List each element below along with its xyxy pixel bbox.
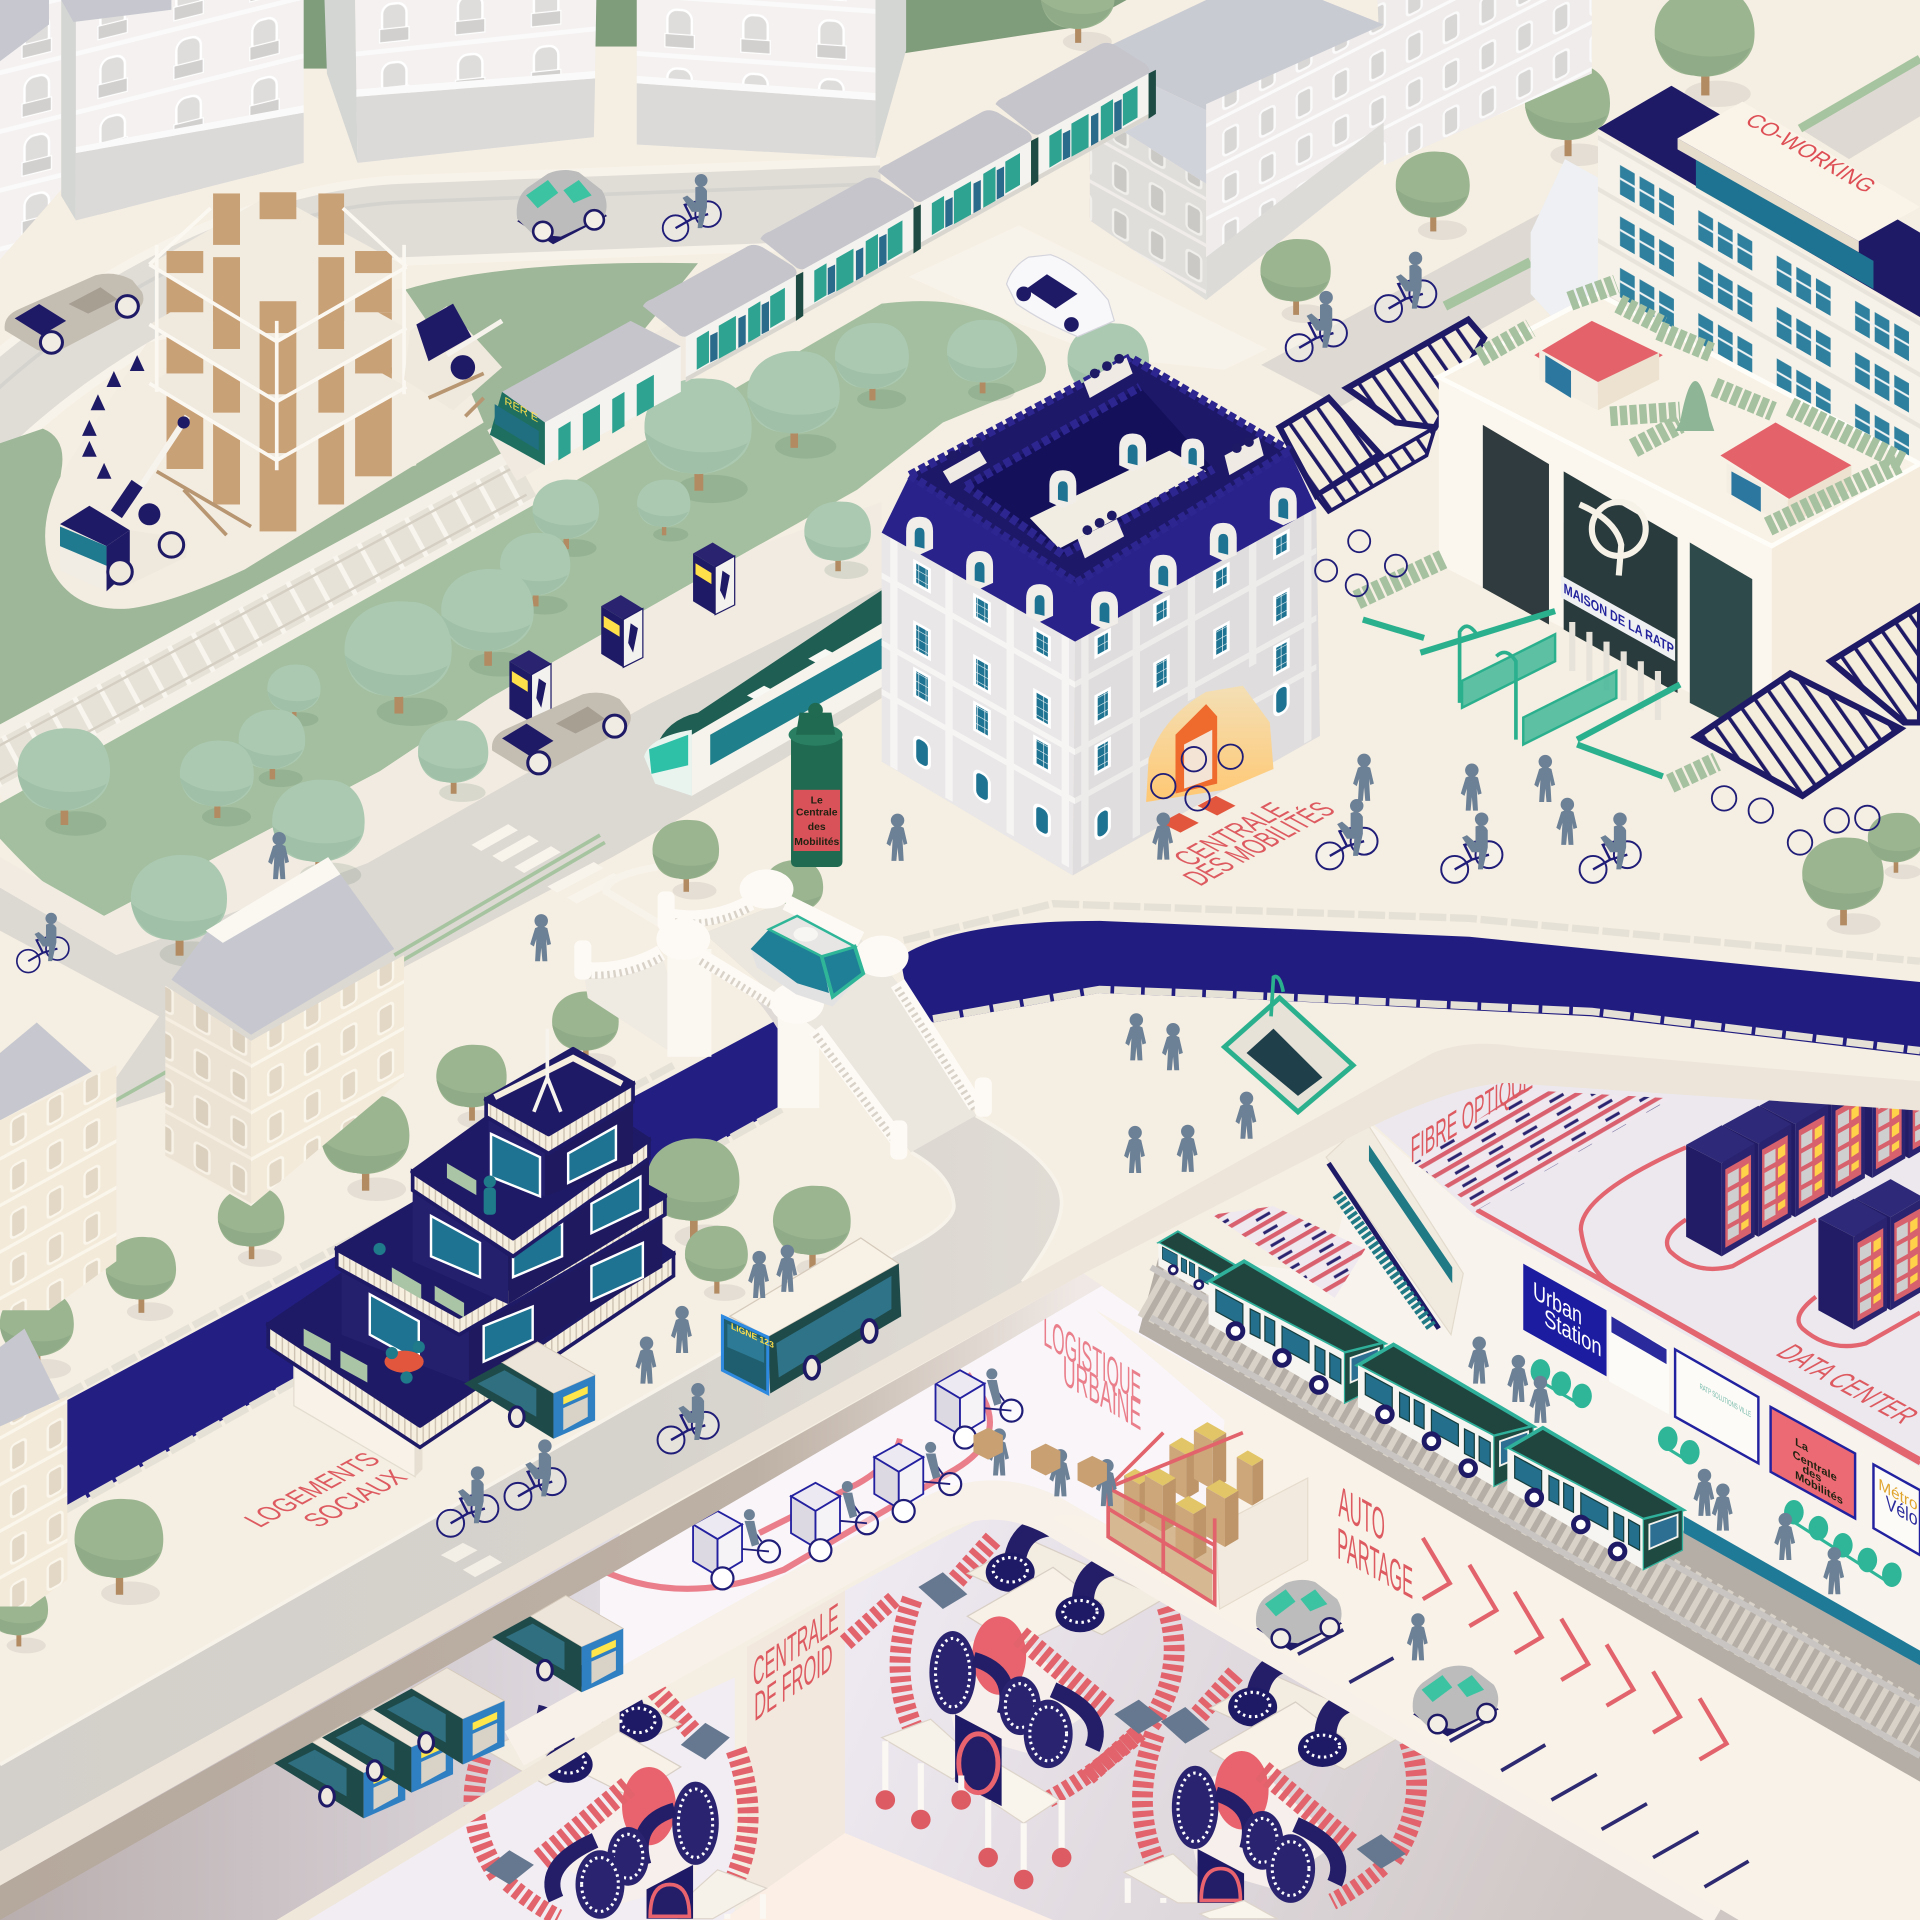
glowing archway bbox=[1146, 686, 1273, 802]
bridge bbox=[574, 869, 992, 1160]
cargo bikes bbox=[693, 1368, 1022, 1589]
cooling machines bbox=[474, 1525, 1417, 1919]
auto partage label bbox=[1337, 1477, 1413, 1610]
delivery workers with parcels bbox=[973, 1428, 1117, 1506]
construction site patch bbox=[45, 288, 484, 609]
traffic cones bbox=[82, 355, 144, 479]
auto partage pedestrian bbox=[1407, 1613, 1428, 1660]
roof top ring bbox=[910, 358, 1289, 583]
terrace deck bbox=[1439, 294, 1920, 546]
urban station sign: Station bbox=[1544, 1303, 1602, 1363]
tower facade bbox=[1598, 132, 1920, 527]
parcel shelves bbox=[1108, 1422, 1263, 1604]
logistique urbaine label bbox=[1043, 1307, 1141, 1440]
lower level bus floor bbox=[0, 1531, 620, 1920]
social housing building bbox=[268, 1029, 673, 1477]
road edge lines bbox=[0, 1116, 1062, 1764]
metro train bbox=[1158, 1231, 1682, 1570]
rer e sign: RER E bbox=[504, 394, 538, 425]
park trees bbox=[18, 320, 1149, 967]
block one left wall bbox=[342, 1266, 469, 1384]
first car roof bbox=[502, 321, 681, 422]
isometric city scene: CENTRALE bbox=[753, 1595, 839, 1696]
centrale des mobilites floor label: DES MOBILITÉS bbox=[1174, 797, 1343, 890]
slab underside bbox=[0, 1273, 1102, 1920]
top facade buildings bbox=[0, 0, 1592, 260]
auto partage floor bbox=[1053, 1310, 1920, 1920]
bikes by shelter bbox=[1315, 530, 1880, 855]
white panel with navy band bbox=[1609, 1315, 1669, 1414]
block one windows bbox=[370, 1243, 643, 1362]
front facade bbox=[1439, 380, 1772, 735]
red floor line bbox=[1477, 1210, 1920, 1460]
red chevrons bbox=[1423, 1538, 1727, 1760]
orange locker bbox=[1176, 704, 1217, 793]
plaza pedestrians by canal bbox=[1124, 1013, 1256, 1173]
road crosswalk bbox=[441, 1543, 502, 1577]
centrale des mobilites poster: Mobilités bbox=[1795, 1468, 1843, 1508]
top terrace floor bbox=[486, 1049, 633, 1134]
balustrade balusters bbox=[583, 907, 976, 1145]
left wall bbox=[882, 533, 1075, 876]
upper columns bbox=[167, 257, 392, 394]
block three right wall bbox=[545, 1103, 633, 1196]
top green lawns bbox=[298, 0, 1127, 69]
roof slab bbox=[149, 193, 407, 342]
second terrace floor bbox=[337, 1129, 665, 1316]
third terrace floor bbox=[413, 1074, 649, 1238]
shared cars bbox=[1256, 1580, 1499, 1736]
quay railings bbox=[59, 904, 1920, 1511]
crane truck bbox=[60, 416, 251, 591]
solutions ville poster bbox=[1675, 1349, 1758, 1463]
third terrace rim bbox=[413, 1140, 649, 1256]
fibre optique cable field bbox=[1212, 1090, 1671, 1298]
white car bbox=[1007, 255, 1114, 337]
first terrace floor bbox=[268, 1153, 673, 1425]
main city bus: LIGNE 123 bbox=[731, 1321, 774, 1350]
block one right wall bbox=[469, 1206, 662, 1384]
cactus pot bbox=[1675, 381, 1714, 431]
lower columns bbox=[167, 367, 392, 531]
road on slab bbox=[0, 902, 1062, 1851]
centrale des mobilites building bbox=[882, 354, 1320, 876]
left quay patch bbox=[583, 953, 689, 1056]
small bus under housing bbox=[464, 1342, 595, 1439]
platform edge strip bbox=[1684, 1516, 1920, 1665]
morris column bbox=[789, 703, 842, 867]
green metro entrance railings bbox=[1363, 611, 1680, 776]
building left edge middle bbox=[0, 1022, 116, 1310]
metro entrance with escalator bbox=[1224, 977, 1353, 1112]
right wall mouldings bbox=[1075, 508, 1316, 871]
stone posts bbox=[574, 869, 992, 1160]
top terrace rim bbox=[486, 1084, 633, 1153]
morris column: Centrale bbox=[796, 808, 838, 819]
light beam over machine room bbox=[514, 1500, 1722, 1908]
charging stations bbox=[509, 542, 735, 722]
red roof pavilions bbox=[1534, 321, 1851, 527]
isometric city scene: PARTAGE bbox=[1337, 1518, 1413, 1610]
small building behind terrace bbox=[1531, 159, 1598, 367]
block three windows bbox=[491, 1127, 616, 1196]
lower bay wall and floor bbox=[722, 1591, 1053, 1920]
terrace tables bbox=[384, 1351, 424, 1373]
bike shelters bbox=[1280, 320, 1484, 512]
tram bbox=[644, 590, 884, 796]
centrale des mobilites poster: des bbox=[1802, 1462, 1822, 1485]
logements sociaux label bbox=[237, 1449, 415, 1531]
metro velo poster: Métro bbox=[1878, 1475, 1918, 1515]
central park lawn bbox=[0, 301, 1046, 916]
roof column stubs bbox=[167, 192, 392, 333]
upper left lawn bbox=[0, 263, 698, 735]
red bike stands bbox=[1161, 796, 1236, 833]
navy roof bbox=[1598, 86, 1920, 317]
underground buses bbox=[274, 1596, 623, 1818]
logements sociaux label: LOGEMENTS bbox=[237, 1449, 388, 1531]
station passengers bbox=[1468, 1337, 1844, 1594]
second crane by train bbox=[404, 304, 502, 416]
street pedestrians and cyclists west bbox=[17, 814, 907, 973]
green benches bbox=[1531, 1359, 1902, 1587]
main city bus bbox=[722, 1238, 901, 1393]
isometric city scene: URBAINE bbox=[1063, 1346, 1141, 1440]
coworking roof box bbox=[1678, 102, 1920, 241]
data center floor bbox=[1365, 1081, 1920, 1467]
logistics pink track bbox=[606, 1374, 990, 1589]
building a bbox=[0, 0, 61, 260]
pedestrians by bus stop bbox=[636, 1245, 797, 1384]
building d bbox=[637, 0, 876, 158]
ratp logo bbox=[1580, 502, 1646, 576]
construction tower bbox=[149, 192, 407, 531]
locker drawers bbox=[1184, 730, 1212, 789]
morris column: Mobilités bbox=[794, 837, 839, 848]
station wall and platform bbox=[1224, 1120, 1920, 1663]
base side bbox=[415, 1425, 422, 1477]
third floor slab bbox=[149, 312, 407, 460]
building f bbox=[1378, 0, 1592, 165]
bridge deck bbox=[704, 902, 976, 1152]
cyclists on lower road bbox=[437, 1383, 719, 1537]
right side road and green lane bbox=[909, 59, 1920, 407]
canal upper section bbox=[901, 921, 1920, 1056]
maison de la ratp sign: MAISON DE LA RATP bbox=[1564, 581, 1674, 658]
terrace planters bbox=[304, 1163, 476, 1382]
auto partage label: AUTO bbox=[1338, 1477, 1385, 1552]
pilotis lines bbox=[1572, 622, 1658, 720]
maison de la ratp building bbox=[1439, 86, 1920, 735]
centrale des mobilites floor label: CENTRALE bbox=[1165, 798, 1297, 870]
white base columns bbox=[294, 1359, 415, 1477]
mansard roof bbox=[882, 358, 1316, 642]
first car side bbox=[545, 347, 681, 465]
roof crenellations bbox=[910, 358, 1289, 583]
isometric city scene: DE FROID bbox=[754, 1634, 833, 1731]
left wall windows bbox=[915, 561, 1049, 838]
right wall bbox=[1073, 508, 1320, 876]
left machine room white area bbox=[294, 1678, 735, 1920]
second terrace rim bbox=[337, 1196, 665, 1335]
large haussmann block top right bbox=[1090, 0, 1384, 300]
morris column: des bbox=[808, 822, 826, 833]
ratp plaza planters bbox=[1357, 558, 1717, 784]
terrace residents bbox=[373, 1176, 496, 1384]
middle columns bbox=[167, 312, 392, 453]
glass panel center bbox=[1564, 471, 1678, 693]
building c bbox=[324, 0, 358, 163]
right wall windows bbox=[1096, 531, 1288, 841]
metro velo poster bbox=[1873, 1464, 1920, 1555]
shuttle on bridge bbox=[751, 916, 863, 1007]
beam on lower floor bbox=[277, 1712, 620, 1920]
gray car on top road bbox=[517, 170, 607, 244]
urban station sign: Urban bbox=[1533, 1276, 1582, 1331]
inner courtyard facade bbox=[1030, 451, 1206, 549]
left wall mouldings bbox=[882, 533, 1075, 871]
green roof planters bbox=[1479, 284, 1904, 527]
track bed bbox=[1139, 1239, 1920, 1782]
bikes in archway bbox=[1151, 744, 1243, 811]
logistics floor bbox=[600, 1273, 1261, 1714]
chimneys bbox=[943, 354, 1264, 558]
streets and tram road bbox=[0, 502, 882, 1108]
logements sociaux label: SOCIAUX bbox=[296, 1466, 415, 1531]
building b bbox=[61, 0, 76, 220]
maison de la ratp sign bbox=[1561, 576, 1675, 661]
centrale des mobilites floor label bbox=[1165, 797, 1343, 890]
first terrace rim bbox=[268, 1254, 673, 1447]
right foreground bike shelters bbox=[1696, 606, 1920, 796]
bridge balustrades bbox=[583, 902, 976, 1140]
railway track with ballast bbox=[0, 104, 1108, 786]
morris column: Le bbox=[811, 795, 823, 806]
beige parked car west bbox=[5, 274, 143, 353]
beige car near chargers bbox=[492, 693, 631, 774]
centrale des mobilites poster: La bbox=[1795, 1435, 1808, 1455]
first car livery bbox=[558, 375, 654, 460]
urban station sign bbox=[1523, 1264, 1607, 1376]
isometric city scene: LOGISTIQUE bbox=[1043, 1307, 1141, 1412]
data center ring tracks bbox=[1581, 1147, 1920, 1463]
courtyard bbox=[966, 387, 1213, 555]
navy band on panel bbox=[1611, 1316, 1667, 1364]
concrete slab edge bbox=[0, 1044, 1920, 1886]
coworking roof lip bbox=[1678, 138, 1859, 252]
dormers bbox=[906, 433, 1297, 629]
escalator bbox=[1326, 1120, 1463, 1335]
top parapet bbox=[495, 1058, 622, 1097]
side facade bbox=[1772, 467, 1920, 735]
scaffolding rails bbox=[149, 208, 407, 470]
solutions ville poster: RATP SOLUTIONS VILLE bbox=[1700, 1381, 1751, 1419]
parking dashes bbox=[1298, 1630, 1749, 1887]
machine room background bbox=[845, 1518, 1739, 1920]
bridge arch underside bbox=[711, 961, 778, 1029]
block two right wall bbox=[508, 1158, 649, 1304]
cab windscreen bbox=[495, 404, 539, 451]
centrale de froid label on wall bbox=[753, 1595, 839, 1731]
centrale cyclist bbox=[1152, 812, 1173, 860]
stone piers bbox=[667, 949, 819, 1108]
centrale des mobilites poster bbox=[1771, 1407, 1855, 1518]
canal lower section bbox=[64, 1016, 784, 1511]
curved upper road bbox=[0, 184, 882, 429]
glass panel left bbox=[1483, 425, 1549, 624]
second floor slab bbox=[149, 253, 407, 402]
block three left wall bbox=[489, 1117, 545, 1196]
storage wall bbox=[1216, 1478, 1308, 1609]
server racks bbox=[1686, 1100, 1920, 1330]
building left edge lower bbox=[0, 1329, 67, 1607]
first car cab bbox=[490, 392, 545, 465]
centrale des mobilites poster: Centrale bbox=[1793, 1447, 1837, 1485]
coworking glass band bbox=[1696, 159, 1873, 289]
rooftop antenna bbox=[534, 1029, 561, 1112]
block two left wall bbox=[413, 1190, 508, 1304]
block two windows bbox=[431, 1177, 640, 1277]
building far left upper bbox=[165, 857, 404, 1206]
plaza pedestrians and cyclists bbox=[663, 174, 1641, 883]
RER train bbox=[490, 43, 1156, 465]
glass panel right bbox=[1690, 542, 1752, 735]
isometric city scene: FIBRE OPTIQUE bbox=[1411, 1055, 1533, 1172]
